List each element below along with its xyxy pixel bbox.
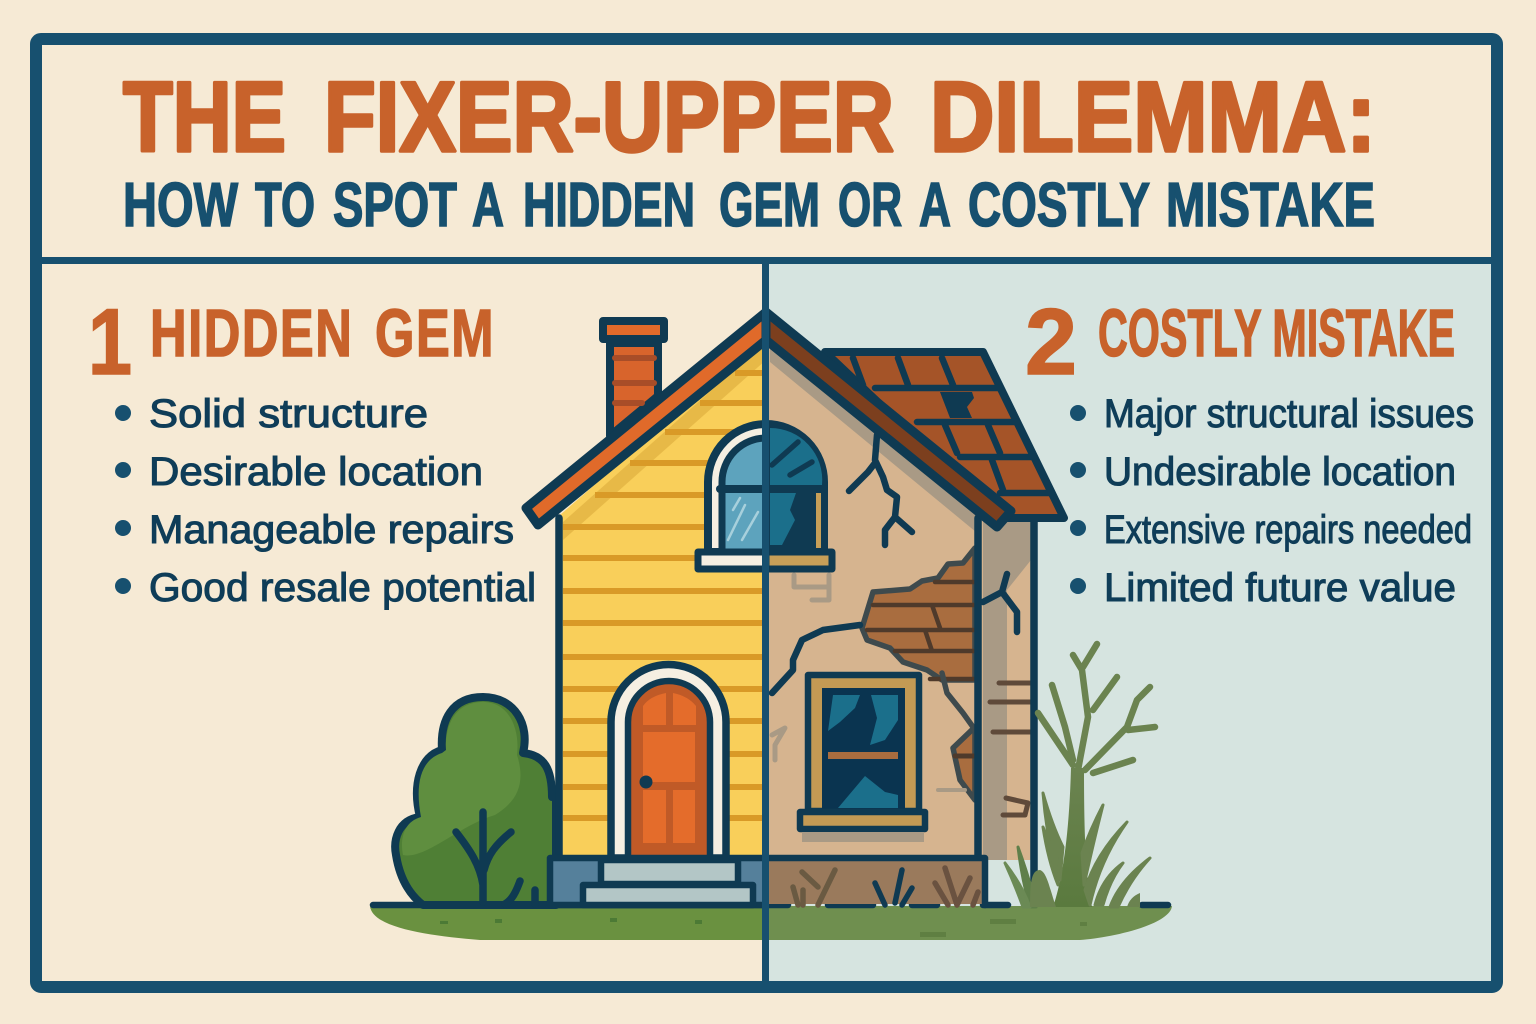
subtitle: SPOT	[333, 171, 457, 240]
bullet: good resale potential: Good resale potential	[149, 566, 536, 610]
panel: hidden gem list	[88, 289, 536, 610]
window sill	[698, 552, 832, 569]
illustration: split house	[370, 264, 1172, 985]
subtitle: OR	[838, 171, 902, 240]
bullet: limited future value: Limited future value	[1104, 566, 1456, 610]
damage: exposed brick	[862, 548, 975, 800]
icon: broken square window	[800, 675, 925, 842]
subtitle: A	[472, 171, 504, 240]
subtitle: GEM	[719, 171, 820, 240]
subtitle: COSTLY	[968, 171, 1150, 240]
subtitle: TO	[255, 171, 315, 240]
bullet: desirable location: Desirable location	[149, 450, 483, 494]
icon: ground	[370, 905, 1172, 940]
bullet: undesirable location: Undesirable location	[1104, 450, 1456, 494]
number 1: 1	[88, 289, 132, 394]
heading: hidden gem: HIDDEN GEM	[150, 296, 495, 371]
panel: costly mistake list	[1025, 289, 1474, 610]
bullet: major structural issues: Major structural issues	[1104, 392, 1474, 436]
title: FIXER-UPPER	[324, 61, 894, 172]
panel: left foundation and steps	[550, 858, 766, 905]
subtitle: HOW	[123, 171, 238, 240]
door knob	[641, 777, 651, 787]
title: DILEMMA:	[930, 61, 1376, 172]
icon: left roof bar orange	[526, 312, 766, 525]
number 2: 2	[1025, 289, 1077, 394]
subtitle	[123, 171, 1375, 240]
panel: right foundation	[766, 858, 985, 905]
title	[123, 61, 1376, 172]
subtitle: HIDDEN	[523, 171, 695, 240]
subtitle: A	[919, 171, 951, 240]
bullet: solid structure: Solid structure	[149, 392, 428, 436]
title: THE	[123, 61, 286, 172]
icon: bush	[395, 697, 556, 905]
icon: arched window half intact half broken	[698, 424, 832, 569]
bullet: manageable repairs: Manageable repairs	[149, 508, 514, 552]
subtitle: MISTAKE	[1166, 171, 1375, 240]
icon: red arched door	[611, 664, 726, 858]
panel: right wall damaged plaster	[766, 335, 1034, 880]
panel: left wall yellow siding	[559, 335, 766, 858]
damage: cracks	[772, 435, 1017, 693]
panel: costly mistake background	[766, 264, 1493, 985]
icon: damaged roof shingles	[825, 352, 1064, 518]
icon: dead tree and weeds	[1005, 644, 1155, 907]
icon: right roof bar brown	[766, 312, 1011, 527]
divider: centre line	[762, 264, 769, 985]
icon: chimney	[603, 321, 664, 436]
